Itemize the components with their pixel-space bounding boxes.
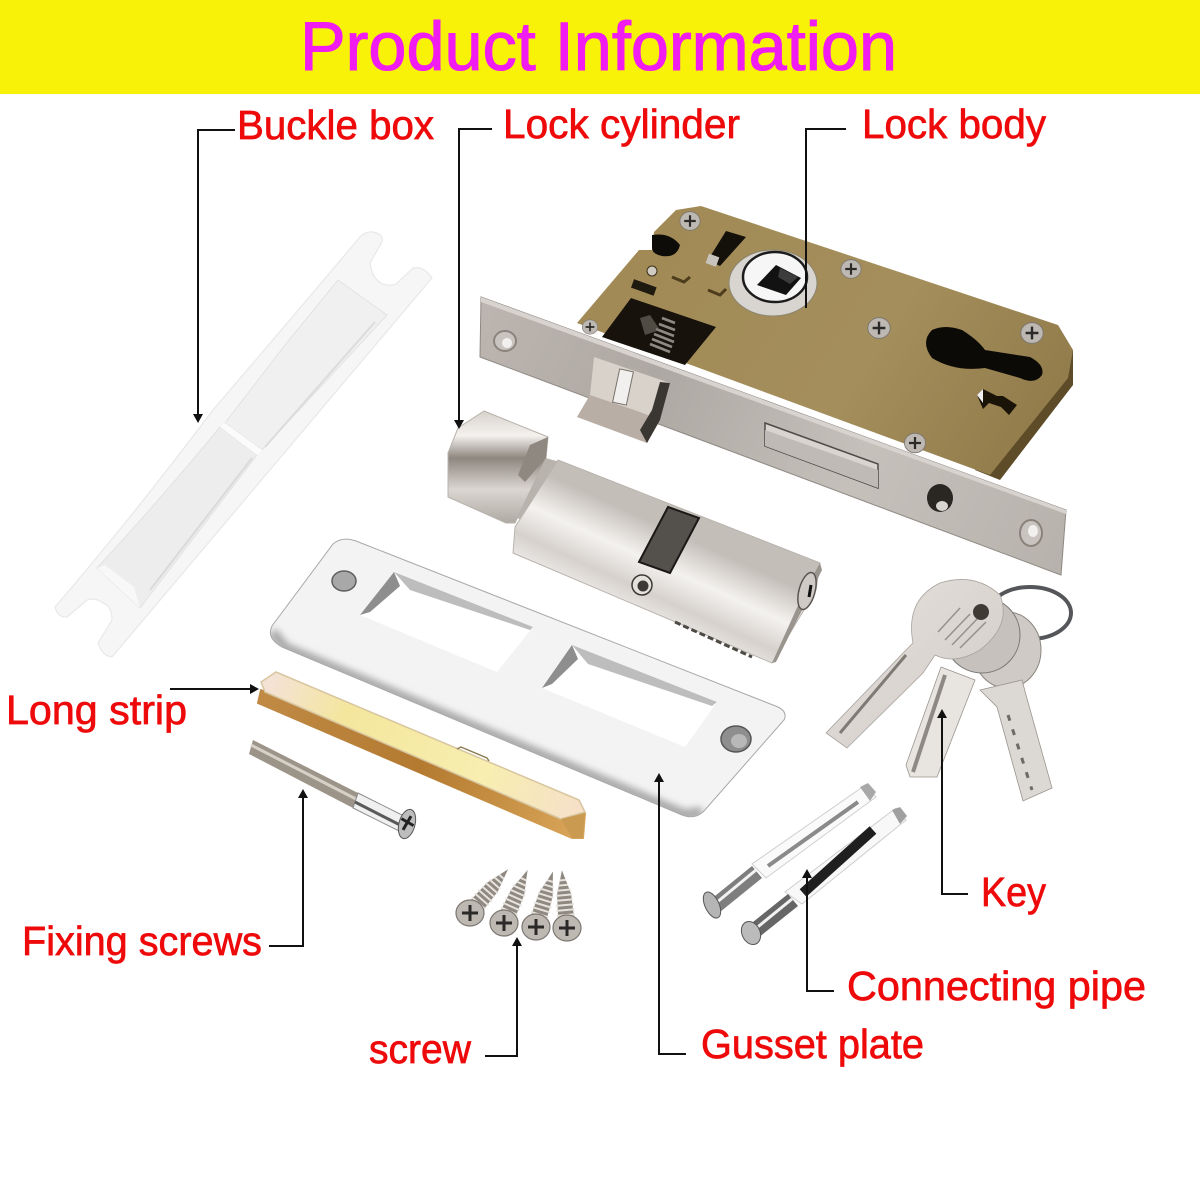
label: screw: screw	[369, 1026, 471, 1072]
cylinder hole	[926, 327, 1042, 381]
small details	[647, 266, 657, 276]
knob	[448, 411, 548, 523]
leader: connecting pipe	[802, 869, 834, 991]
leader: lock cylinder	[454, 129, 492, 429]
key one	[826, 579, 1003, 748]
knob neck	[512, 455, 560, 525]
corner notch	[652, 234, 680, 256]
screw holes	[332, 571, 356, 591]
header banner	[0, 0, 1200, 94]
label: fixing screws: Fixing screws	[22, 918, 262, 964]
set screw	[632, 575, 652, 595]
title: Product Information	[300, 8, 897, 85]
cylinder slot	[639, 507, 699, 573]
window one	[360, 572, 533, 672]
label: gusset plate: Gusset plate	[701, 1021, 924, 1067]
deadbolt	[765, 423, 878, 488]
key two	[906, 597, 1020, 777]
leader: screw	[485, 937, 522, 1056]
label: connecting pipe: Connecting pipe	[847, 963, 1146, 1009]
leader: key	[937, 709, 968, 894]
part: lock body	[480, 206, 1073, 575]
label: lock body: Lock body	[862, 101, 1046, 147]
part: long strip	[258, 672, 585, 838]
part: fixing screw	[249, 740, 419, 841]
plate holes	[494, 331, 516, 351]
part: gusset plate	[270, 539, 785, 817]
pipe one	[752, 786, 876, 878]
bevel	[272, 632, 702, 815]
key ring	[989, 587, 1071, 639]
face plate	[480, 297, 1066, 575]
label: buckle box: Buckle box	[237, 102, 434, 148]
pin row	[675, 622, 752, 657]
small slot	[708, 231, 746, 266]
leader: lock body	[806, 129, 846, 308]
leader: long strip	[170, 684, 259, 694]
leader: gusset plate	[654, 773, 686, 1054]
part: wood screws	[456, 863, 581, 941]
window with spring	[602, 298, 716, 365]
key way	[794, 571, 820, 611]
pipe two	[785, 808, 906, 904]
part: keys	[826, 579, 1071, 801]
screws	[680, 212, 700, 230]
key three	[973, 612, 1052, 801]
latch	[577, 357, 670, 443]
cylinder body	[513, 460, 820, 663]
leader: fixing screws	[269, 789, 308, 946]
label: key: Key	[981, 869, 1046, 915]
part: lock cylinder	[448, 411, 822, 663]
label: lock cylinder: Lock cylinder	[503, 101, 740, 147]
window two	[542, 645, 717, 747]
spindle hub	[729, 250, 817, 316]
label: long strip: Long strip	[6, 687, 187, 733]
part: connecting pipes	[700, 783, 907, 948]
part: buckle box	[55, 232, 432, 657]
leader: buckle box	[193, 130, 235, 423]
small key notch	[977, 389, 1017, 415]
